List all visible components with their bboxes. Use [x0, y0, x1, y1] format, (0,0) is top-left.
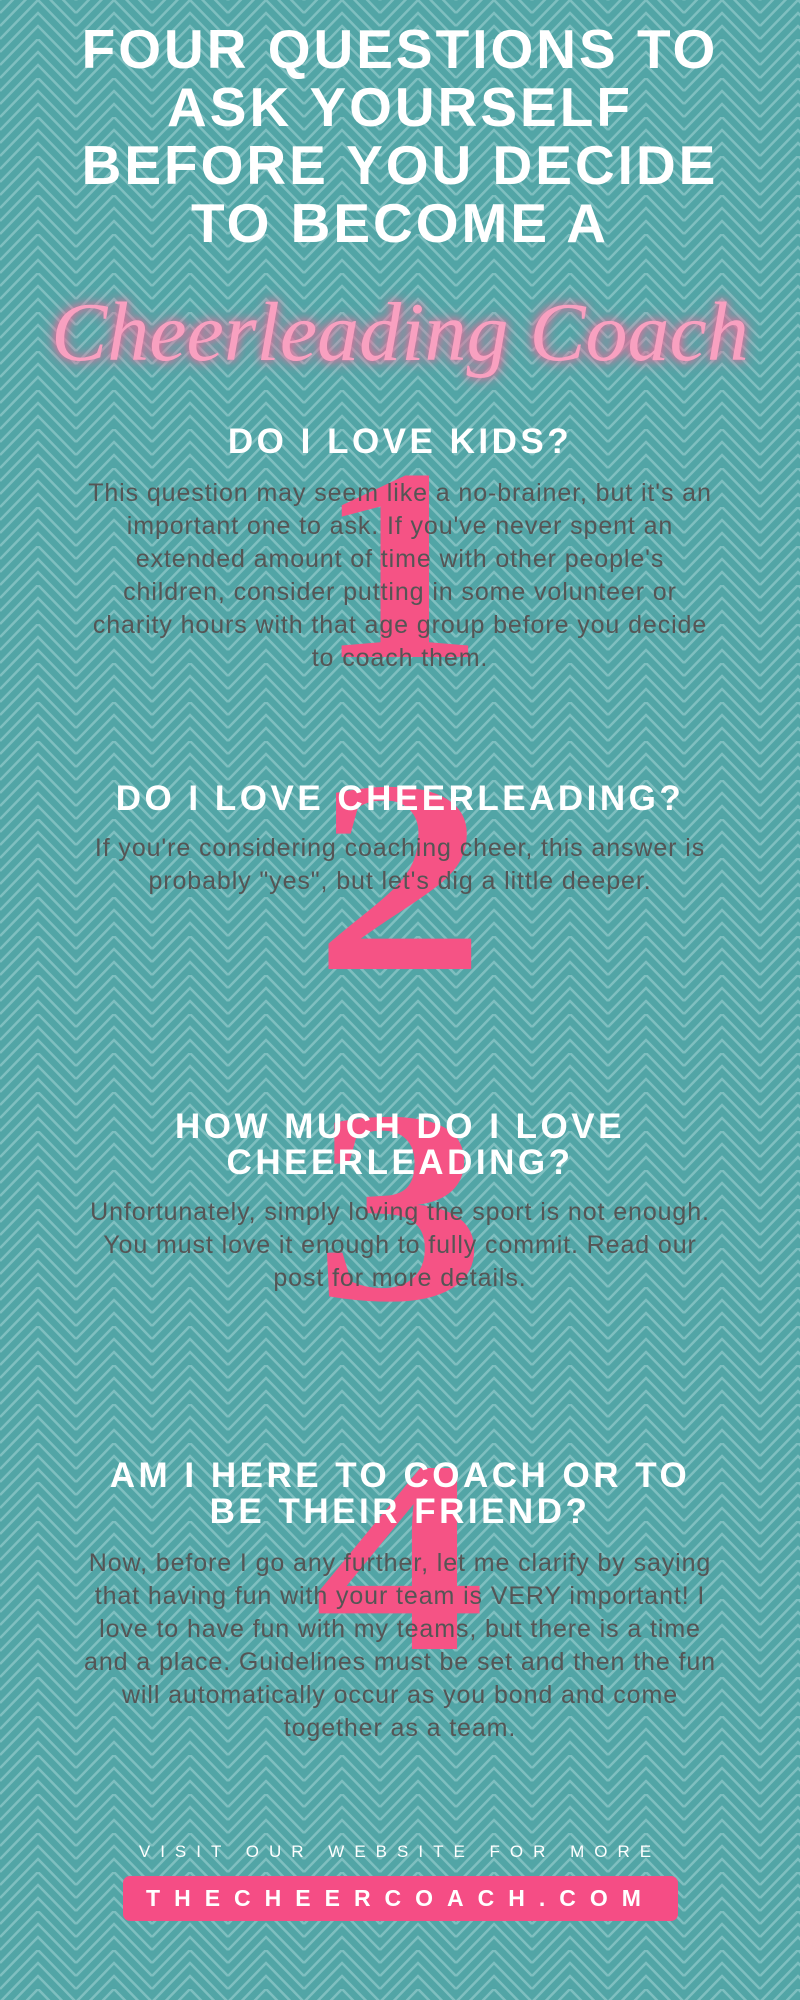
body 3: Unfortunately, simply loving the sport is not enough.: [90, 1198, 710, 1226]
body 4: that having fun with your team is VERY important! I: [95, 1582, 705, 1610]
body 3: You must love it enough to fully commit. Read our: [103, 1231, 697, 1259]
body 3: [90, 1198, 710, 1292]
title: BEFORE YOU DECIDE: [82, 134, 718, 196]
body 4: together as a team.: [284, 1714, 516, 1742]
body 2: If you're considering coaching cheer, this answer is: [95, 834, 705, 862]
number 1: 1: [314, 413, 486, 717]
heading 4: BE THEIR FRIEND?: [210, 1492, 590, 1531]
body 4: and a place. Guidelines must be set and then the fun: [84, 1648, 716, 1676]
heading 2: DO I LOVE CHEERLEADING?: [116, 779, 684, 818]
number 4: 4: [314, 1405, 486, 1709]
number 3: 3: [314, 1055, 486, 1359]
footer caption: VISIT OUR WEBSITE FOR MORE: [139, 1842, 661, 1861]
title: FOUR QUESTIONS TO: [82, 18, 718, 80]
body 4: love to have fun with my teams, but there is a time: [99, 1615, 701, 1643]
heading 1: DO I LOVE KIDS?: [228, 422, 572, 461]
title: ASK YOURSELF: [167, 76, 633, 138]
body 4: will automatically occur as you bond and come: [122, 1681, 678, 1709]
body 1: children, consider putting in some volunteer or: [123, 578, 677, 606]
heading 3: HOW MUCH DO I LOVE: [175, 1107, 625, 1146]
body 1: [88, 479, 712, 672]
body 1: to coach them.: [312, 644, 488, 672]
heading 4: AM I HERE TO COACH OR TO: [110, 1456, 690, 1495]
heading 4: [110, 1456, 690, 1531]
body 4: Now, before I go any further, let me clarify by saying: [89, 1549, 711, 1577]
website button: [123, 1876, 678, 1921]
website button: THECHEERCOACH.COM: [146, 1885, 655, 1911]
title: TO BECOME A: [191, 192, 609, 254]
body 2: [95, 834, 705, 895]
body 1: important one to ask. If you've never spent an: [127, 512, 673, 540]
body 4: [84, 1549, 716, 1742]
body 3: post for more details.: [273, 1264, 527, 1292]
heading 3: [175, 1107, 625, 1182]
body 2: probably "yes", but let's dig a little deeper.: [148, 867, 652, 895]
title: [82, 18, 718, 254]
heading 3: CHEERLEADING?: [227, 1143, 573, 1182]
script subtitle: Cheerleading Coach: [51, 286, 749, 379]
number 2: 2: [314, 725, 486, 1029]
body 1: This question may seem like a no-brainer, but it's an: [88, 479, 712, 507]
body 1: extended amount of time with other people's: [136, 545, 664, 573]
body 1: charity hours with that age group before you decide: [93, 611, 707, 639]
